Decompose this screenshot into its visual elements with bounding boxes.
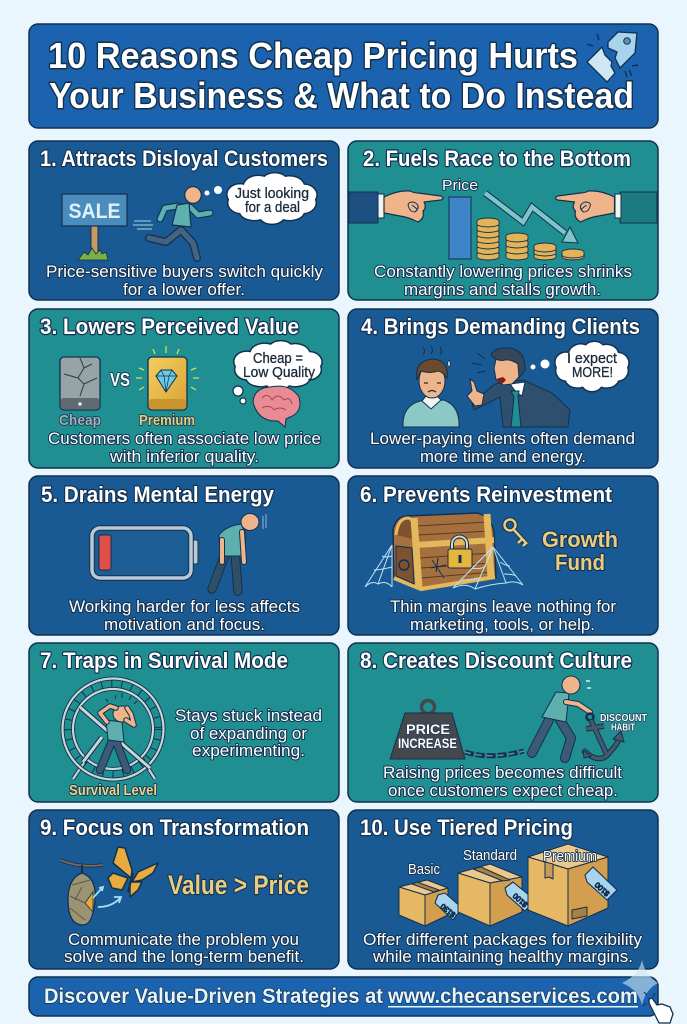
footer banner [29, 960, 673, 1023]
icon: sale sign: SALE [68, 200, 120, 223]
labels: cheap and premium: Premium [139, 412, 195, 429]
tier labels: Standard [463, 847, 517, 864]
label: discount habit [600, 712, 647, 734]
icon: exhausted person [212, 514, 266, 591]
panel: 7 traps in survival mode [29, 643, 339, 802]
icon: left pointing hand [349, 191, 443, 223]
title: Your Business & What to Do Instead [49, 75, 634, 116]
tier labels: Premium [543, 848, 597, 865]
description 4: more time and energy. [420, 447, 586, 466]
icon: chain [465, 751, 524, 756]
description 9: solve and the long-term benefit. [64, 947, 304, 966]
label: discount habit: HABIT [611, 722, 635, 734]
panel: 10 use tiered pricing [348, 810, 658, 969]
vs label: VS [110, 370, 130, 390]
description 4 [370, 429, 635, 466]
description 2: margins and stalls growth. [404, 280, 601, 299]
icon: sale sign [62, 194, 127, 260]
description 6: marketing, tools, or help. [410, 615, 595, 634]
label: growth fund: Growth [542, 527, 618, 552]
heading 10: 10. Use Tiered Pricing [360, 815, 573, 840]
description 10 [363, 930, 643, 966]
thought bubble: i expect more [530, 341, 629, 392]
tier labels: Basic [408, 861, 440, 878]
title [48, 35, 634, 116]
icon: cocoon [60, 860, 103, 925]
thought bubble: i expect more: MORE! [572, 365, 613, 381]
icon: right pointing hand [556, 191, 657, 223]
title banner [29, 24, 658, 128]
description 6: Thin margins leave nothing for [390, 597, 616, 616]
label: survival level: Survival Level [69, 783, 157, 799]
description 7: Stays stuck instead [175, 706, 322, 725]
icon: butterfly [108, 847, 158, 897]
labels: cheap and premium [59, 412, 195, 429]
icon: basic box: $130 [439, 902, 457, 919]
panel: 3 lowers perceived value [29, 309, 339, 468]
labels: cheap and premium: Cheap [59, 412, 101, 429]
panel: 9 focus on transformation [29, 810, 339, 969]
heading 6: 6. Prevents Reinvestment [360, 482, 613, 507]
description 2: Constantly lowering prices shrinks [374, 262, 632, 281]
panel: 6 prevents reinvestment [348, 476, 658, 635]
footer call to action: Discover Value-Driven Strategies at [44, 984, 383, 1008]
icon: broken price tag [587, 32, 638, 82]
icon: brain [253, 386, 300, 427]
panel: 8 creates discount culture [348, 643, 658, 802]
thought bubble: cheap = low quality: Cheap = [253, 351, 303, 367]
icon: worried employee [403, 346, 459, 427]
description 3 [48, 429, 321, 466]
icon: hamster wheel with person [62, 678, 164, 780]
description 5: motivation and focus. [104, 615, 265, 634]
icon: premium gold phone [136, 346, 199, 410]
description 1 [46, 262, 324, 299]
heading 1: 1. Attracts Disloyal Customers [40, 146, 328, 171]
heading 7: 7. Traps in Survival Mode [40, 648, 288, 673]
icon: key [504, 520, 527, 546]
icon: treasure chest [393, 513, 496, 590]
icon: standard box [458, 864, 535, 926]
description 2 [374, 262, 632, 299]
description 7: experimenting. [192, 741, 305, 760]
icon: standard box: $100 [511, 891, 529, 909]
heading 2: 2. Fuels Race to the Bottom [363, 146, 631, 171]
footer call to action: www.checanservices.com [387, 984, 638, 1008]
label: discount habit: DISCOUNT [600, 712, 647, 724]
label: value greater than price: Value > Price [168, 870, 309, 900]
icon: low battery [92, 528, 198, 578]
bar: price [449, 197, 471, 259]
tier labels [408, 847, 597, 878]
icon: premium box: $100 [593, 880, 611, 898]
icon: price increase weight: PRICE [406, 722, 450, 737]
description 9: Communicate the problem you [68, 930, 299, 949]
description 4: Lower-paying clients often demand [370, 429, 635, 448]
thought bubble: i expect more: I expect [567, 351, 617, 367]
title: 10 Reasons Cheap Pricing Hurts [48, 35, 578, 76]
icon: cursor hand [643, 992, 673, 1023]
icon: price increase weight [390, 700, 465, 759]
heading 9: 9. Focus on Transformation [40, 815, 309, 840]
description 10: Offer different packages for flexibility [363, 930, 643, 949]
panel: 5 drains mental energy [29, 476, 339, 635]
icon: angry boss [467, 348, 570, 427]
arrow: falling margin [485, 193, 578, 243]
heading 4: 4. Brings Demanding Clients [361, 314, 640, 339]
thought bubble: just looking for a deal [204, 173, 317, 224]
thought bubble: just looking for a deal: Just looking [235, 186, 309, 202]
thought bubble: just looking for a deal: for a deal [245, 200, 300, 216]
icon: premium box [528, 844, 617, 926]
description 1: Price-sensitive buyers switch quickly [46, 262, 324, 281]
label: growth fund: Fund [555, 550, 605, 575]
description 8: Raising prices becomes difficult [383, 763, 622, 782]
description 6 [390, 597, 616, 634]
description 8 [383, 763, 622, 800]
description 3: Customers often associate low price [48, 429, 321, 448]
icon: anchor [583, 714, 624, 759]
panel: 2 race to the bottom [348, 141, 658, 300]
description 5 [69, 597, 300, 634]
thought bubble: cheap = low quality: Low Quality [243, 365, 316, 381]
label: growth fund [542, 527, 618, 575]
icon: price increase weight: INCREASE [398, 736, 457, 751]
description 7: of expanding or [190, 724, 307, 743]
heading 8: 8. Creates Discount Culture [360, 648, 632, 673]
heading 5: 5. Drains Mental Energy [41, 482, 275, 507]
icon: spider webs [365, 545, 523, 589]
coin stacks [477, 218, 584, 260]
description 10: while maintaining healthy margins. [372, 947, 633, 966]
icon: arrows [93, 887, 121, 907]
icon: sparkle [622, 960, 658, 1005]
description 1: for a lower offer. [123, 280, 245, 299]
description 3: with inferior quality. [109, 447, 259, 466]
icon: running customer [133, 187, 210, 258]
panel: 1 attracts disloyal customers [29, 141, 339, 300]
footer call to action [44, 984, 638, 1008]
thought bubble: cheap = low quality [233, 341, 322, 404]
label: price: Price [442, 177, 478, 194]
description 7 [175, 706, 322, 760]
description 8: once customers expect cheap. [388, 781, 618, 800]
icon: person pushing [532, 676, 591, 758]
icon: cracked cheap phone [60, 357, 100, 410]
panel: 4 brings demanding clients [348, 309, 658, 468]
description 9 [64, 930, 304, 966]
description 5: Working harder for less affects [69, 597, 300, 616]
heading 3: 3. Lowers Perceived Value [40, 314, 299, 339]
icon: basic box [399, 880, 462, 926]
